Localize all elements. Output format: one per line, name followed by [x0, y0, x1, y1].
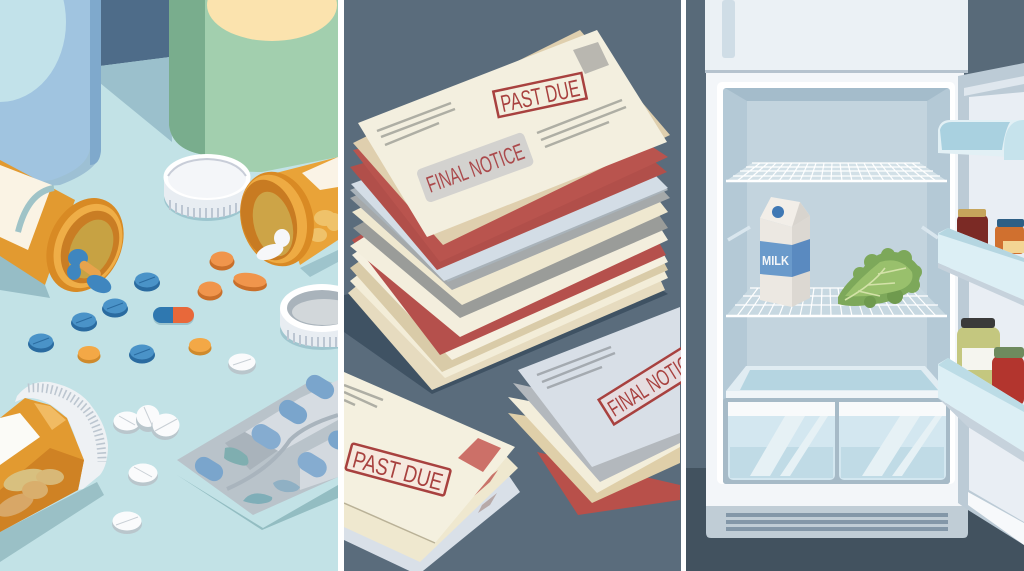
final notice window [416, 132, 535, 203]
lower-left envelope group [344, 372, 520, 571]
bottle body [0, 398, 84, 532]
white tablets [112, 354, 256, 534]
pickle jar [957, 318, 1000, 385]
red jar [992, 347, 1024, 406]
bottle cap [15, 382, 108, 490]
orange bottle, lower left [0, 382, 108, 562]
white bottle cap, right [280, 284, 338, 350]
milk carton [760, 197, 810, 307]
crisper shelf [726, 366, 947, 398]
address lines [377, 100, 626, 147]
stacked envelopes [348, 148, 670, 390]
past due stamp [345, 443, 451, 498]
past due stamp: PAST DUE [350, 447, 446, 496]
white bottle cap [164, 154, 250, 221]
middle door bin [938, 228, 1024, 306]
large green bottle [169, 0, 338, 172]
top envelope [358, 30, 667, 237]
fridge base grille [706, 506, 968, 538]
panel: pile of overdue bills [344, 0, 707, 571]
panel: spilled medication [0, 0, 364, 571]
blue and orange capsule [153, 307, 194, 325]
lettuce [838, 248, 922, 308]
dark back wall [100, 0, 170, 66]
final notice window: FINAL NOTICE [423, 138, 528, 198]
jam jar [957, 209, 988, 248]
lower-right envelope group [508, 307, 681, 515]
scattered blue tablets [28, 272, 160, 364]
orange bottle, top left [0, 160, 124, 298]
freezer door [705, 0, 968, 73]
lower door bin [938, 358, 1024, 462]
orange bottle, top right [240, 157, 338, 277]
upper door bin [938, 120, 1024, 160]
crisper drawers [723, 398, 950, 484]
open door [958, 63, 1024, 545]
past due stamp [493, 73, 587, 119]
bottle shadow on table [100, 57, 172, 142]
large blue bottle [0, 0, 101, 190]
final notice stamp [597, 347, 681, 426]
final notice stamp: FINAL NOTICE [603, 345, 703, 421]
top wire shelf [726, 163, 947, 181]
panel: empty refrigerator [686, 0, 1024, 571]
shelf supports [728, 227, 938, 240]
floor [686, 468, 1024, 571]
past due stamp: PAST DUE [498, 75, 582, 118]
lower wire shelf [726, 288, 947, 316]
milk carton: MILK [762, 253, 790, 268]
tan envelope under top [353, 30, 670, 245]
stamp square [573, 42, 609, 74]
stack shadow [344, 291, 668, 394]
scattered orange tablets [78, 252, 268, 364]
orange jar [995, 219, 1024, 254]
blister pack [177, 371, 351, 530]
fridge body [706, 73, 964, 506]
